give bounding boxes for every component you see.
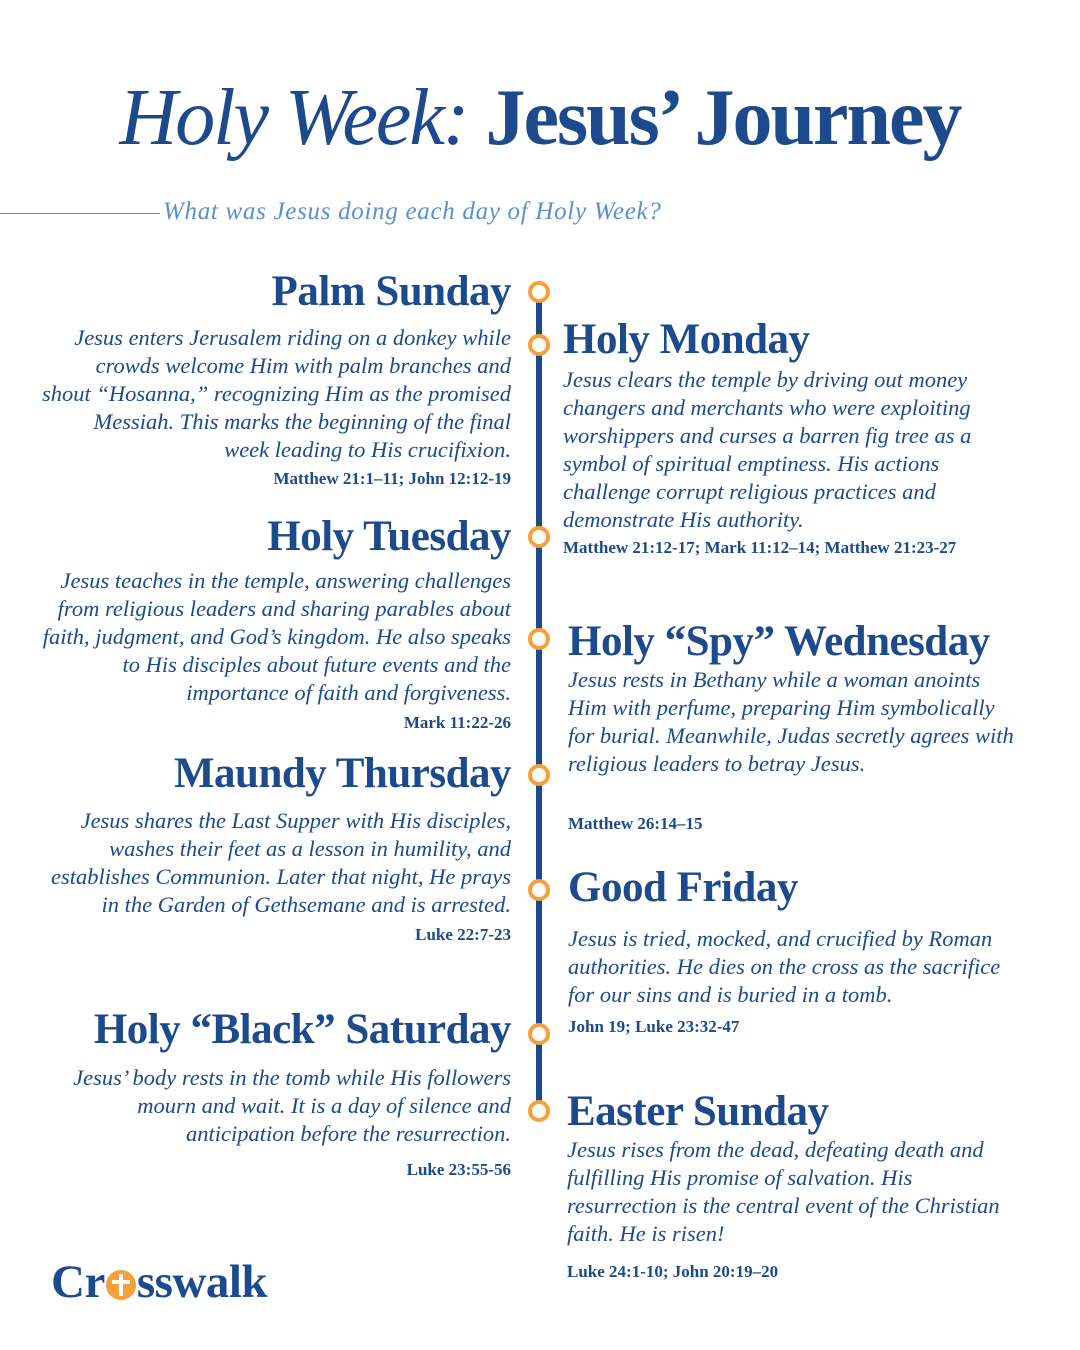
panel: good friday — [568, 864, 1000, 1036]
logo: Crosswalk: Cr sswalk — [51, 1256, 267, 1308]
panel: easter sunday: Easter Sunday — [567, 1088, 829, 1135]
panel: easter sunday: Jesus rises from the dead, defeating death and — [567, 1137, 984, 1162]
panel: holy tuesday: Jesus teaches in the temple, answering challenges — [60, 568, 511, 593]
panel: maundy thursday: Luke 22:7-23 — [415, 925, 511, 944]
panel: holy monday: changers and merchants who were exploiting — [563, 395, 971, 420]
panel: spy wednesday: Matthew 26:14–15 — [568, 814, 703, 833]
panel: holy monday: worshippers and curses a barren fig tree as a — [563, 423, 971, 448]
panel: black saturday: Luke 23:55-56 — [407, 1160, 511, 1179]
title: Holy Week: Jesus’ Journey — [120, 74, 960, 162]
panel: holy tuesday: to His disciples about future events and the — [122, 652, 511, 677]
panel: palm sunday — [42, 268, 512, 488]
panel: spy wednesday: Holy “Spy” Wednesday — [568, 618, 990, 665]
panel: palm sunday: Matthew 21:1–11; John 12:12-19 — [273, 469, 511, 488]
panel: palm sunday: Messiah. This marks the beginning of the final — [94, 409, 511, 434]
panel: spy wednesday: for burial. Meanwhile, Judas secretly agrees with — [568, 723, 1014, 748]
panel: holy monday: challenge corrupt religious practices and — [563, 479, 936, 504]
panel: spy wednesday — [568, 618, 1014, 833]
panel: good friday: Good Friday — [568, 864, 798, 911]
panel: black saturday — [73, 1006, 512, 1179]
panel: holy tuesday: importance of faith and forgiveness. — [186, 680, 511, 705]
timeline — [528, 281, 550, 1122]
panel: good friday: Jesus is tried, mocked, and crucified by Roman — [568, 926, 992, 951]
panel: spy wednesday: religious leaders to betray Jesus. — [568, 751, 865, 776]
panel: good friday: for our sins and is buried in a tomb. — [568, 982, 892, 1007]
panel: palm sunday: crowds welcome Him with palm branches and — [96, 353, 511, 378]
panel: maundy thursday: in the Garden of Gethsemane and is arrested. — [101, 892, 511, 917]
panel: black saturday: Holy “Black” Saturday — [94, 1006, 511, 1053]
panel: easter sunday: fulfilling His promise of salvation. His — [567, 1165, 912, 1190]
panel: holy monday: Holy Monday — [563, 316, 810, 363]
panel: easter sunday: Luke 24:1-10; John 20:19–20 — [567, 1262, 778, 1281]
panel: holy tuesday: Holy Tuesday — [267, 513, 511, 560]
panel: spy wednesday: Him with perfume, preparing Him symbolically — [568, 695, 995, 720]
panel: holy tuesday — [43, 513, 512, 732]
panel: maundy thursday — [51, 750, 512, 944]
panel: holy tuesday: faith, judgment, and God’s kingdom. He also speaks — [43, 624, 511, 649]
panel: easter sunday: resurrection is the central event of the Christian — [567, 1193, 1000, 1218]
subtitle: What was Jesus doing each day of Holy Week? — [163, 198, 662, 225]
panel: black saturday: mourn and wait. It is a day of silence and — [137, 1093, 511, 1118]
panel: good friday: authorities. He dies on the cross as the sacrifice — [568, 954, 1000, 979]
panel: palm sunday: Palm Sunday — [272, 268, 511, 315]
panel: maundy thursday: Jesus shares the Last Supper with His disciples, — [81, 808, 511, 833]
panel: palm sunday: week leading to His crucifixion. — [224, 437, 511, 462]
panel: holy monday: Jesus clears the temple by driving out money — [563, 367, 967, 392]
panel: maundy thursday: Maundy Thursday — [174, 750, 511, 797]
panel: holy monday: symbol of spiritual emptiness. His actions — [563, 451, 939, 476]
panel: holy monday: demonstrate His authority. — [563, 507, 804, 532]
panel: easter sunday: faith. He is risen! — [567, 1221, 724, 1246]
panel: good friday: John 19; Luke 23:32-47 — [568, 1017, 739, 1036]
panel: holy tuesday: from religious leaders and sharing parables about — [58, 596, 511, 621]
panel: easter sunday — [567, 1088, 1000, 1281]
panel: palm sunday: Jesus enters Jerusalem riding on a donkey while — [74, 325, 511, 350]
panel: holy monday: Matthew 21:12-17; Mark 11:12–14; Matthew 21:23-27 — [563, 538, 956, 557]
panel: holy tuesday: Mark 11:22-26 — [404, 713, 511, 732]
panel: maundy thursday: washes their feet as a lesson in humility, and — [109, 836, 511, 861]
panel: black saturday: anticipation before the resurrection. — [186, 1121, 511, 1146]
panel: spy wednesday: Jesus rests in Bethany while a woman anoints — [568, 667, 980, 692]
panel: black saturday: Jesus’ body rests in the tomb while His followers — [73, 1065, 511, 1090]
panel: maundy thursday: establishes Communion. Later that night, He prays — [51, 864, 511, 889]
panel: holy monday — [563, 316, 971, 557]
panel: palm sunday: shout “Hosanna,” recognizing Him as the promised — [42, 381, 511, 406]
